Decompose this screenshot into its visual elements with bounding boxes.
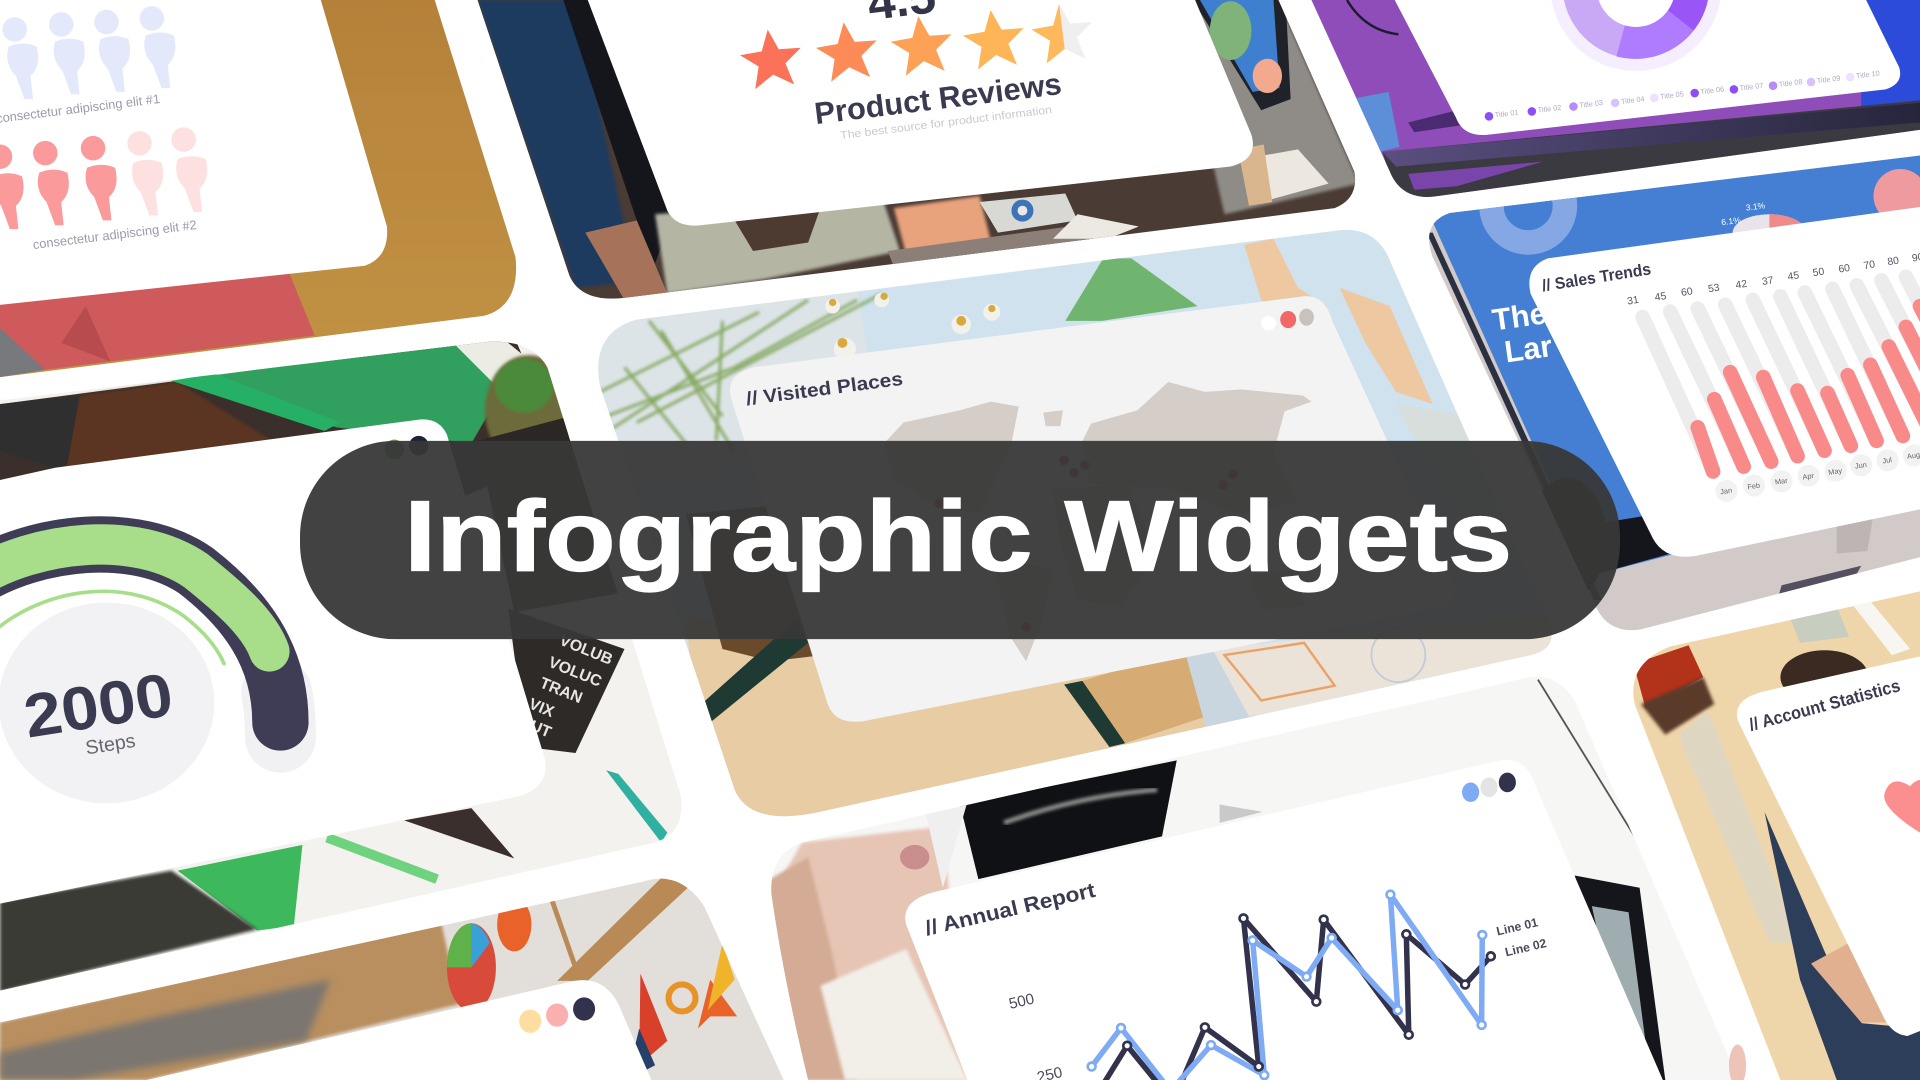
bar chart — [1643, 277, 1920, 471]
white card — [1395, 0, 1900, 135]
heading: product reviews: Product Reviews — [813, 67, 1063, 131]
panel: steps gauge card — [0, 331, 698, 992]
window dots — [1462, 773, 1516, 802]
photo: desk with folder and papers: TRAN — [537, 675, 585, 707]
month labels — [1716, 444, 1920, 502]
photo: monitor with blue slide: Lar — [1502, 329, 1554, 369]
bar values: 60 — [1680, 286, 1694, 299]
window dots — [384, 436, 429, 459]
gauge — [0, 544, 280, 737]
photo: maps, flowers and basket — [588, 220, 1567, 845]
panel: annual report card — [765, 667, 1746, 1080]
white card — [0, 419, 546, 904]
heading: visited places: // Visited Places — [745, 369, 904, 410]
month labels: Apr — [1802, 471, 1815, 482]
bar values — [1627, 252, 1920, 308]
legend: Title 02 — [1537, 103, 1562, 115]
banner pill — [300, 441, 1620, 639]
photo: desk with folder and papers — [0, 331, 698, 992]
bar values: 70 — [1863, 259, 1876, 272]
legend: Title 08 — [1778, 77, 1803, 89]
title banner — [300, 441, 1620, 639]
window dots — [519, 997, 595, 1033]
legend: Title 07 — [1739, 81, 1764, 93]
gauge centre — [0, 602, 214, 803]
white card — [0, 0, 387, 305]
photo: desk with folder and papers: UT — [527, 718, 554, 742]
photo: monitor with blue slide: 6.1% — [1721, 215, 1742, 227]
month labels: Jul — [1882, 455, 1893, 465]
photo: monitor with blue slide: 3.1% — [1745, 200, 1766, 213]
white card — [1737, 656, 1920, 1036]
icon row: pink people — [0, 127, 207, 229]
card — [730, 296, 1454, 722]
label: steps: Steps — [84, 730, 137, 759]
white card — [588, 0, 1253, 226]
photo: monitor with blue slide — [1420, 147, 1920, 637]
panel: sales trends card — [1420, 147, 1920, 637]
heading: account statistics: // Account Statistics — [1747, 675, 1902, 735]
photo: monitor with blue slide: The — [1490, 296, 1549, 338]
legend: Title 03 — [1579, 98, 1603, 110]
map pins — [934, 456, 1238, 632]
star rating — [737, 0, 1097, 90]
legend: Title 05 — [1660, 89, 1684, 101]
panel: people chart card — [0, 0, 527, 380]
white card — [147, 980, 651, 1080]
panel: account statistics card — [1622, 588, 1920, 1080]
photo: purple wall and desk — [1311, 0, 1920, 208]
hand detail — [1729, 1044, 1746, 1080]
bar values: 42 — [1735, 279, 1748, 292]
photo: charts on board — [0, 869, 784, 1080]
legend: line 02: Line 02 — [1504, 936, 1548, 959]
panel: product reviews card — [478, 0, 1359, 306]
value: 2000: 2000 — [19, 660, 177, 751]
caption 1: consectetur adipiscing elit #1 — [0, 91, 161, 126]
bar values: 80 — [1887, 256, 1900, 268]
axis label 500: 500 — [1007, 991, 1036, 1013]
month labels: Jan — [1720, 486, 1733, 496]
bar values: 60 — [1838, 263, 1851, 276]
photo: desk with folder and papers: VOLUB — [557, 632, 615, 669]
photo: person at cafe — [1622, 588, 1920, 1080]
world map — [884, 382, 1311, 661]
bar values: 50 — [1812, 267, 1825, 279]
legend — [1485, 69, 1880, 121]
photo: desk with folder and papers: VOLUC — [546, 654, 604, 691]
donut chart — [1550, 0, 1722, 71]
icon: heart — [1884, 779, 1920, 833]
legend: Title 06 — [1700, 84, 1725, 96]
title: Infographic Widgets — [404, 481, 1512, 593]
bar values: 31 — [1627, 295, 1640, 308]
window dots — [1261, 309, 1314, 331]
subtitle: The best source for product information — [840, 104, 1053, 142]
bar values: 53 — [1707, 283, 1721, 295]
bar values: 37 — [1761, 275, 1775, 288]
heading: annual report: // Annual Report — [923, 879, 1098, 940]
photo: gold wall and red shirt — [0, 0, 527, 380]
photo: desk with folder and papers: VIX — [526, 696, 557, 721]
legend: Title 01 — [1494, 108, 1519, 120]
month labels: Feb — [1747, 481, 1761, 491]
month labels: Mar — [1774, 476, 1789, 487]
photo: person and desk — [478, 0, 1359, 306]
legend: Title 10 — [1855, 69, 1880, 80]
bar values: 45 — [1787, 270, 1800, 283]
panel: donut legend card — [1311, 0, 1920, 208]
photo: woman and office — [765, 667, 1745, 1080]
month labels: Jun — [1854, 460, 1867, 471]
heading: sales trends: // Sales Trends — [1541, 259, 1652, 295]
legend: Title 04 — [1620, 94, 1645, 106]
legend: line 01: Line 01 — [1495, 915, 1539, 938]
panel: bottom-left card with charts photo — [0, 869, 784, 1080]
white card — [1529, 207, 1920, 557]
panel: visited places card — [588, 220, 1567, 845]
bar values: 45 — [1654, 291, 1667, 304]
white card — [905, 760, 1663, 1080]
caption 2: consectetur adipiscing elit #2 — [32, 217, 198, 252]
icon row: blue people — [2, 6, 175, 99]
line chart — [1088, 891, 1495, 1080]
legend: Title 09 — [1816, 73, 1841, 85]
month labels: May — [1828, 466, 1843, 477]
